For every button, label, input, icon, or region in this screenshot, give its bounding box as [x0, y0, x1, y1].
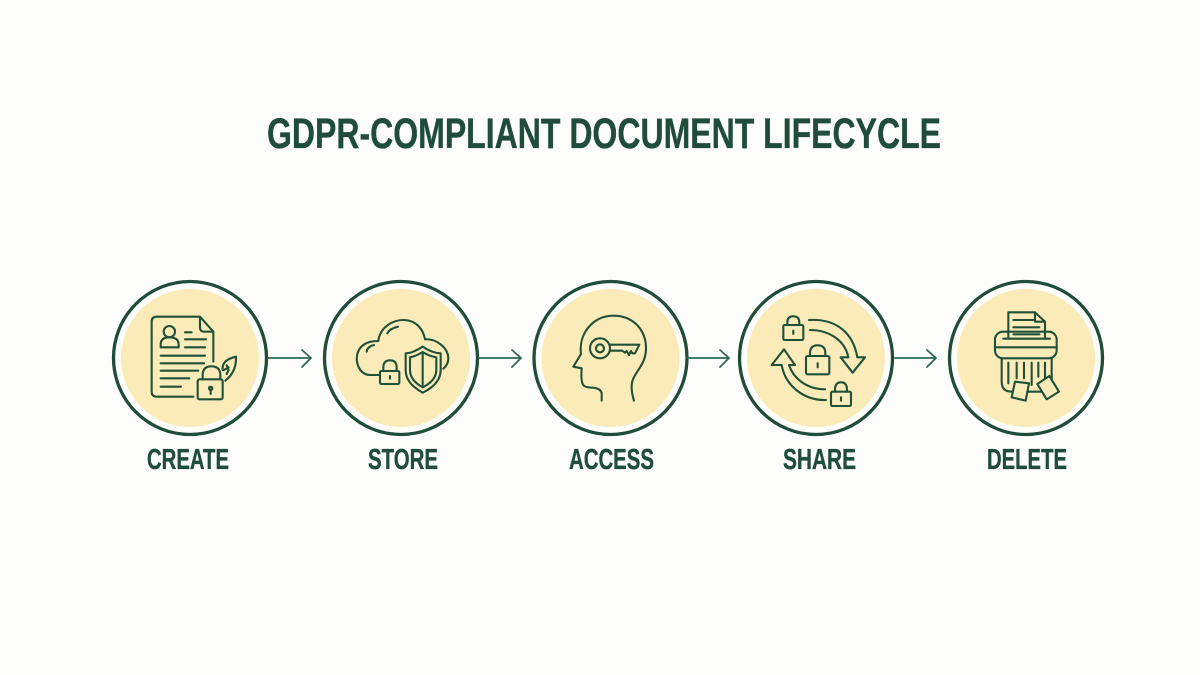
- label: share: SHARE: [783, 444, 856, 476]
- step: store: [324, 282, 478, 476]
- delete circle: [950, 282, 1102, 434]
- step: create: [114, 282, 266, 476]
- arrow: share to delete: [895, 350, 936, 367]
- step: share: [740, 282, 892, 476]
- icon: head with key: [573, 316, 646, 401]
- icon: cloud with padlock and shield: [357, 320, 448, 393]
- store circle: [324, 282, 478, 434]
- label: access: ACCESS: [569, 444, 654, 476]
- access circle: [534, 282, 687, 434]
- step: delete: [950, 282, 1102, 476]
- icon: paper shredder: [995, 312, 1059, 401]
- label: delete: DELETE: [987, 444, 1067, 476]
- arrow: store to access: [479, 350, 521, 367]
- step: access: [534, 282, 687, 476]
- share circle: [740, 282, 892, 434]
- icon: document with padlock and leaf: [152, 317, 236, 399]
- arrow: access to share: [688, 350, 729, 367]
- create circle: [114, 282, 266, 434]
- label: create: CREATE: [147, 444, 229, 476]
- icon: circular arrows with padlocks: [772, 316, 865, 406]
- label: store: STORE: [368, 444, 438, 476]
- arrow: create to store: [268, 350, 311, 367]
- title: GDPR-COMPLIANT DOCUMENT LIFECYCLE: [267, 110, 941, 158]
